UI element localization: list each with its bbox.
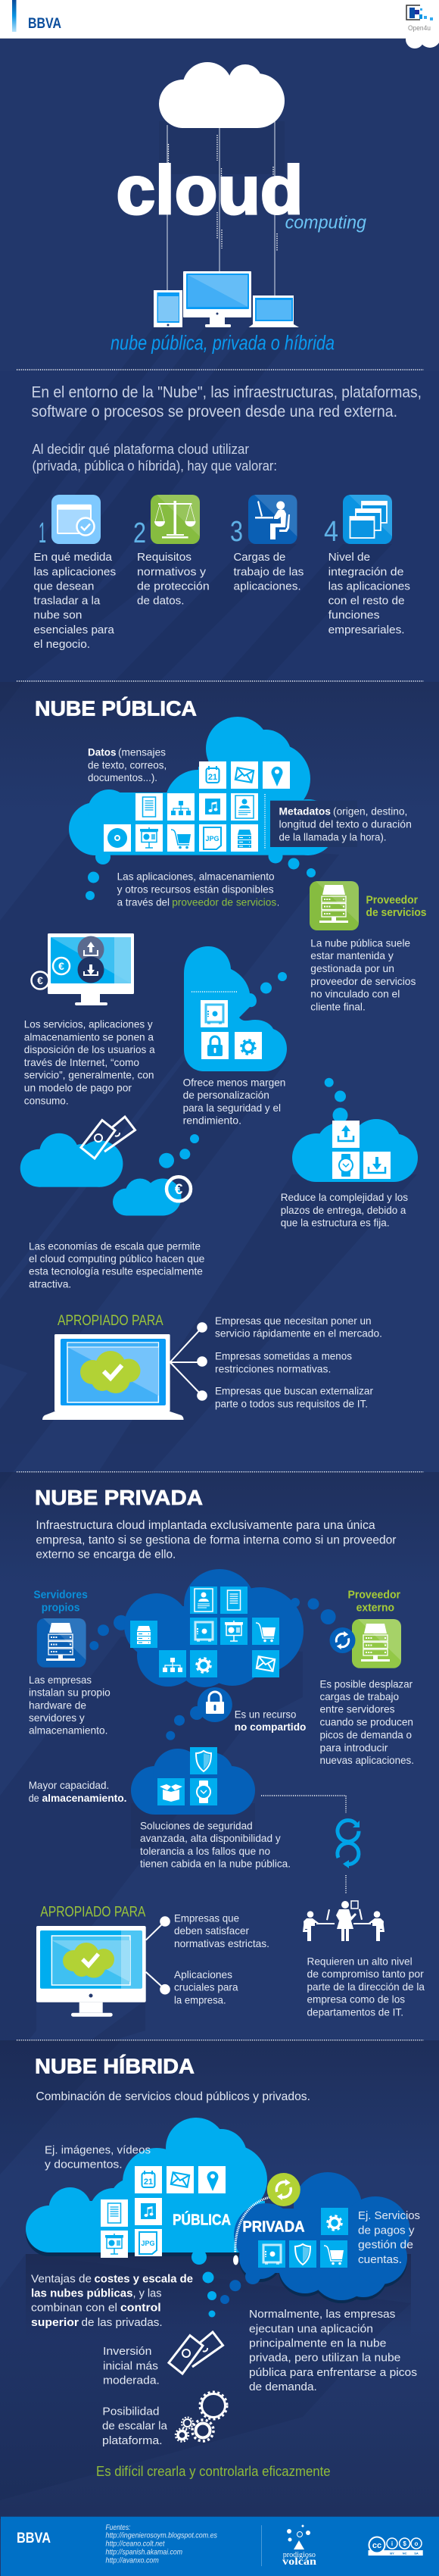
criterion 3: Cargas de [233,551,285,564]
text: hybrid advantages: costes y escala de [94,2272,193,2285]
text: private examples: Ej. Servicios [358,2209,420,2222]
icon: person at computer [248,495,297,544]
icon: refresh [330,1627,356,1653]
text: lower investment: Inversión [103,2345,151,2358]
criterion 3: trabajo de las [233,565,304,578]
zipper [233,2196,273,2265]
icon: monitor with upload and download: € [58,960,64,972]
BBVA logo: BBVA [17,2531,51,2546]
private cloud [220,2172,410,2304]
text: normal use: ejecutan una aplicación [249,2322,373,2335]
text: resources available: proveedor de servicios [172,896,276,908]
sources [106,2524,217,2565]
panel: less customisation: Ofrece menos margen [183,1076,285,1088]
text: public examples [45,2143,151,2171]
label: metadatos: Metadatos [279,805,331,818]
criterion 3: aplicaciones. [233,580,301,592]
label: metadatos: de la llamada y la hora). [279,830,386,843]
label: privada: PRIVADA [242,2219,304,2236]
label: datos: documentos...). [88,771,157,783]
text: normal use: pública para enfrentarse a picos [249,2366,417,2379]
criterion 1: esenciales para [33,624,115,636]
label: datos: Datos [88,746,117,758]
prodigioso volcán logo: prodigioso [283,2550,316,2559]
creative commons badge: cc [372,2541,381,2550]
criterion 1: 1 [39,517,46,549]
criterion 4: las aplicaciones [328,580,410,592]
text: storage capacity: de [29,1792,39,1804]
text: hard to create: Es difícil crearla y controlarla eficazmente [96,2463,331,2479]
criterion 1: el negocio. [33,638,90,651]
panel: reduced complexity: que la estructura es fija. [281,1217,390,1229]
criterion 2: 2 [133,517,146,549]
panel: external provider: cargas de trabajo [319,1690,399,1702]
panel: economies of scale: atractiva. [29,1277,71,1290]
connection lines [167,121,277,295]
icon: monitor with upload and download [32,933,134,1005]
cloud shape [69,717,336,900]
delivery cloud [292,1078,418,1182]
creative commons badge: NC [403,2552,407,2555]
sources: http://spanish.akamai.com [106,2548,182,2556]
text: resources available: y otros recursos están disponibles [117,883,274,896]
panel: commitment: empresa como de los [307,1993,405,2005]
panel: own servers: servidores y [29,1712,85,1724]
panel: service provider [310,881,427,1012]
panel: own servers: hardware de [29,1699,86,1711]
metadata panel [270,801,357,847]
connectors [170,1322,207,1401]
criterion 4: empresariales. [328,624,405,636]
criterion 2 [133,495,210,608]
panel: own servers: Servidores [33,1588,88,1601]
text: resources available [117,871,279,908]
text: lower investment: inicial más [103,2359,158,2372]
text: storage capacity [29,1779,127,1804]
cloud shape [89,1569,336,1740]
text: private cloud definition: externo se encarga de ello. [36,1549,176,1562]
panel: storage and security: Soluciones de seguridad [140,1819,253,1831]
panel: public cloud suited for: Empresas que buscan externalizar [215,1385,373,1397]
panel: private cloud suited for: APROPIADO PARA [40,1904,146,1920]
panel: internet services: consumo. [24,1094,69,1106]
icon: banknotes [81,1117,135,1158]
icon: padlock [206,1692,224,1714]
panel: commitment: Requieren un alto nivel [307,1955,413,1967]
small private cloud [131,1749,255,1815]
panel: external provider: picos de demanda o [319,1729,412,1741]
text: scalable platform: plataforma. [102,2434,163,2447]
text: private cloud definition: empresa, tanto si se gestiona de forma interna como si un proveedor [36,1533,397,1546]
panel: internet services: disposición de los usuarios a [24,1043,155,1055]
text: hybrid advantages: combinan con el [31,2302,117,2315]
icon: laptop with check [42,1334,184,1420]
text: private examples: cuentas. [358,2253,402,2266]
Open4u logo [406,5,439,48]
text: lower investment [103,2345,160,2387]
icon tiles: private data [130,1587,279,1677]
panel: own servers: instalan su propio [29,1687,111,1699]
icon tiles: private [258,2208,348,2268]
label: metadatos: longitud del texto o duración [279,818,412,830]
label: pública: PÚBLICA [173,2211,231,2229]
panel: commitment [261,1796,425,2018]
text: hybrid advantages [31,2272,193,2329]
intro question [32,442,277,474]
subtitle: computing: computing [285,213,367,233]
public cloud [26,2118,267,2317]
sources: http://ingenierosoym.blogspot.com.es [106,2532,217,2540]
icon tiles: security [201,1000,262,1059]
criterion 3 [230,495,304,592]
icon: window with check [51,495,101,544]
label: metadatos: (origen, destino, [333,805,407,818]
text: lower investment: moderada. [103,2374,160,2387]
text: storage capacity: Mayor capacidad. [29,1779,109,1791]
panel: external provider: Es posible desplazar [319,1677,413,1690]
panel: external provider: cuando se producen [319,1715,413,1727]
text: hybrid advantages: control [120,2302,161,2315]
criterion 2: de protección [137,580,210,592]
panel: public cloud suited for: Empresas sometidas a menos [215,1350,352,1362]
panel: private cloud suited for [36,1904,269,2017]
text: resources available: a través del [117,896,170,908]
money cloud [20,1133,123,1187]
icon: green sync [267,2173,300,2206]
panel: less customisation: para la seguridad y el [183,1102,281,1114]
criterion 2: normativos y [137,565,207,578]
panel: less customisation: rendimiento. [183,1114,241,1127]
intro question: (privada, pública o híbrida), hay que valorar: [32,458,277,474]
text: private examples: gestión de [358,2239,413,2252]
sources: Fuentes: [106,2524,131,2532]
text: normal use: privada, pero utilizan la nube [249,2352,400,2365]
icon: banknotes [169,2332,223,2374]
panel: storage and security [29,1747,291,1870]
heading: nube pública: NUBE PÚBLICA [35,696,197,720]
security cloud [184,946,287,1071]
criterion 3: 3 [230,516,243,548]
label: datos: de texto, correos, [88,758,167,771]
panel: economies of scale: esta tecnología resulte especialmente [29,1265,203,1277]
criterion 1: trasladar a la [33,595,101,608]
panel: internet services: Los servicios, aplicaciones y [24,1018,153,1030]
panel: public cloud [69,717,412,908]
criterion 2: de datos. [137,595,185,608]
text: normal use: Normalmente, las empresas [249,2308,395,2321]
criterion 2: Requisitos [137,551,191,564]
panel: economies of scale [20,1117,205,1290]
text: hybrid advantages: , y las [133,2287,162,2300]
panel: service provider: proveedor de servicios [310,975,416,987]
icon: laptop [248,295,299,327]
prodigioso volcán logo: volcán [282,2556,316,2568]
criterion 4: funciones [328,609,380,622]
panel: private cloud suited for: cruciales para [174,1981,238,1993]
panel: public cloud suited for [42,1313,382,1420]
icon tiles: data [104,761,290,852]
connectors [146,1916,170,1994]
panel: public cloud suited for: restricciones normativas. [215,1362,331,1374]
icon: monitor with check [36,1926,146,2017]
text: normal use: principalmente en la nube [249,2337,386,2349]
icon: stacked windows [343,495,392,544]
criterion 4 [324,495,410,636]
creative commons badge: i [391,2540,393,2547]
text: resources available: Las aplicaciones, almacenamiento [117,871,275,883]
panel: own servers: Las empresas [29,1674,92,1686]
label: metadatos [279,805,412,843]
panel: storage and security: avanzada, alta disponibilidad y [140,1832,281,1844]
icon: loop arrows [338,1821,360,1868]
creative commons badge: BY [390,2552,394,2555]
panel: service provider: cliente final. [310,1000,366,1012]
creative commons badge: SA [414,2552,419,2555]
criterion 1 [33,495,116,651]
sources: http://avanxo.com [106,2556,159,2565]
panel: less customisation: de personalización [183,1089,269,1101]
footer [1,2517,439,2576]
header bar [0,0,439,48]
icon: tablet [154,290,182,327]
icon: monitor [183,271,251,327]
icon: blue server [37,1618,86,1668]
icon: meeting people [303,1901,385,1941]
criterion 4: Nivel de [328,551,370,564]
panel: internet services: servicio”, generalmente, con [24,1069,154,1081]
text: private examples [358,2209,420,2266]
text: hybrid advantages: Ventajas de [31,2272,92,2285]
panel: own servers: almacenamiento. [29,1724,107,1737]
icon: monitor with upload and download: € [37,974,43,986]
panel: internet services: un modelo de pago por [24,1082,132,1094]
criterion 1: que desean [33,580,94,592]
title: cloud: cloud [117,153,303,229]
text: scalable platform: Posibilidad [102,2405,159,2418]
panel: private cloud suited for: la empresa. [174,1994,226,2006]
panel: public cloud suited for: servicio rápidamente en el mercado. [215,1327,382,1340]
panel: reduced complexity: plazos de entrega, debido a [281,1204,406,1216]
heading: nube híbrida: NUBE HÍBRIDA [35,2055,195,2078]
panel: commitment: parte de la dirección de la [307,1980,425,1993]
panel: external provider [319,1588,414,1766]
panel: storage and security: tienen cabida en la nube pública. [140,1858,291,1870]
creative commons badge: o [415,2540,419,2547]
panel: storage and security: tolerancia a los fallos que no [140,1845,270,1857]
text: hybrid advantages: las nubes públicas [31,2287,133,2300]
criterion 4: 4 [324,516,338,548]
subtitle: nube pública, privada o híbrida: nube pública, privada o híbrida [111,332,335,355]
criterion 1: En qué medida [33,551,113,564]
small cloud with euro: € [175,1182,183,1198]
panel: public cloud suited for: parte o todos sus requisitos de IT. [215,1397,368,1409]
text: hybrid cloud definition: Combinación de servicios cloud públicos y privados. [36,2090,310,2103]
text: hybrid advantages: superior [31,2316,79,2329]
text: hybrid advantages: de las privadas. [82,2316,163,2329]
panel: internet services: través de Internet, “como [24,1056,139,1068]
panel: commitment: de compromiso tanto por [307,1968,424,1980]
sources: http://ceano.colt.net [106,2540,166,2548]
panel: service provider: Proveedor [366,894,418,907]
Open4u logo: Open4u [408,24,431,32]
icon: scales [151,495,200,544]
panel: service provider: estar mantenida y [310,949,394,961]
text: normal use: de demanda. [249,2381,317,2393]
white cloud [159,62,285,128]
panel: external provider: para introducir [319,1741,388,1753]
text: storage capacity: almacenamiento. [42,1792,127,1804]
criterion 1: nube son [33,609,82,622]
text: public examples: Ej. imágenes, vídeos [45,2143,151,2156]
text: private examples: de pagos y [358,2224,415,2237]
panel: reduced complexity [281,1078,418,1229]
panel: private cloud suited for: Empresas que [174,1912,239,1924]
intro question: Al decidir qué plataforma cloud utilizar [32,442,249,457]
panel: private cloud [89,1569,336,1740]
panel: external provider: nuevas aplicaciones. [319,1754,414,1766]
icon: green server [310,881,359,930]
text: not shared [235,1708,306,1733]
icon tiles: delivery [332,1121,391,1179]
panel: service provider: de servicios [366,906,427,919]
panel: less customisation [183,946,287,1127]
intro text [32,383,422,420]
icon tiles: public [101,2166,226,2258]
panel: internet services: almacenamiento se ponen a [24,1030,154,1043]
creative commons badge: $ [403,2540,406,2547]
intro text: software o procesos se proveen desde una red externa. [32,403,397,420]
text: private cloud definition [36,1519,397,1562]
panel: service provider: gestionada por un [310,962,394,974]
small cloud with euro [113,1134,199,1215]
prodigioso volcán logo [282,2524,316,2568]
text: normal use [249,2308,417,2393]
panel: service provider: La nube pública suele [310,936,410,949]
icon tiles: security features [157,1747,217,1805]
panel: own servers [29,1588,111,1737]
panel: external provider: externo [356,1601,394,1614]
panel: private cloud suited for: normativas estrictas. [174,1937,269,1949]
criterion 4: con el resto de [328,595,405,608]
panel: economies of scale: Las economías de escala que permite [29,1240,201,1252]
panel: service provider: no vinculado con el [310,988,400,1000]
text: not shared: no compartido [235,1721,306,1733]
criterion 4: integración de [328,565,404,578]
text: private cloud definition: Infraestructura cloud implantada exclusivamente para una única [36,1519,375,1532]
panel: external provider: Proveedor [348,1588,400,1601]
panel: public cloud suited for: APROPIADO PARA [58,1313,163,1329]
panel: private cloud suited for: deben satisfacer [174,1924,249,1937]
panel: internet services [24,933,155,1106]
BBVA logo: BBVA [28,16,61,32]
label: datos: (mensajes [118,746,166,758]
text: resources available: . [277,896,279,908]
criterion 1: las aplicaciones [33,565,116,578]
panel: reduced complexity: Reduce la complejidad y los [281,1191,408,1203]
heading: nube privada: NUBE PRIVADA [35,1486,203,1509]
panel: public cloud suited for: Empresas que necesitan poner un [215,1315,372,1327]
creative commons badge [368,2537,423,2556]
panel: hybrid clouds [26,2118,420,2317]
text: not shared: Es un recurso [235,1708,297,1720]
BBVA logo [12,0,61,32]
panel: economies of scale: el cloud computing público hacen que [29,1252,205,1265]
panel: external provider: entre servidores [319,1703,395,1715]
panel: private cloud suited for: Aplicaciones [174,1968,232,1980]
text: public examples: y documentos. [45,2159,123,2171]
hero: cloud connected to devices [111,62,367,355]
panel: own servers: propios [42,1601,79,1614]
text: scalable platform: de escalar la [102,2420,168,2433]
icon: gears [176,2392,227,2441]
panel: commitment: departamentos de IT. [307,2006,403,2018]
label: datos [88,746,167,783]
text: scalable platform [102,2405,168,2447]
icon: green server [352,1619,401,1668]
